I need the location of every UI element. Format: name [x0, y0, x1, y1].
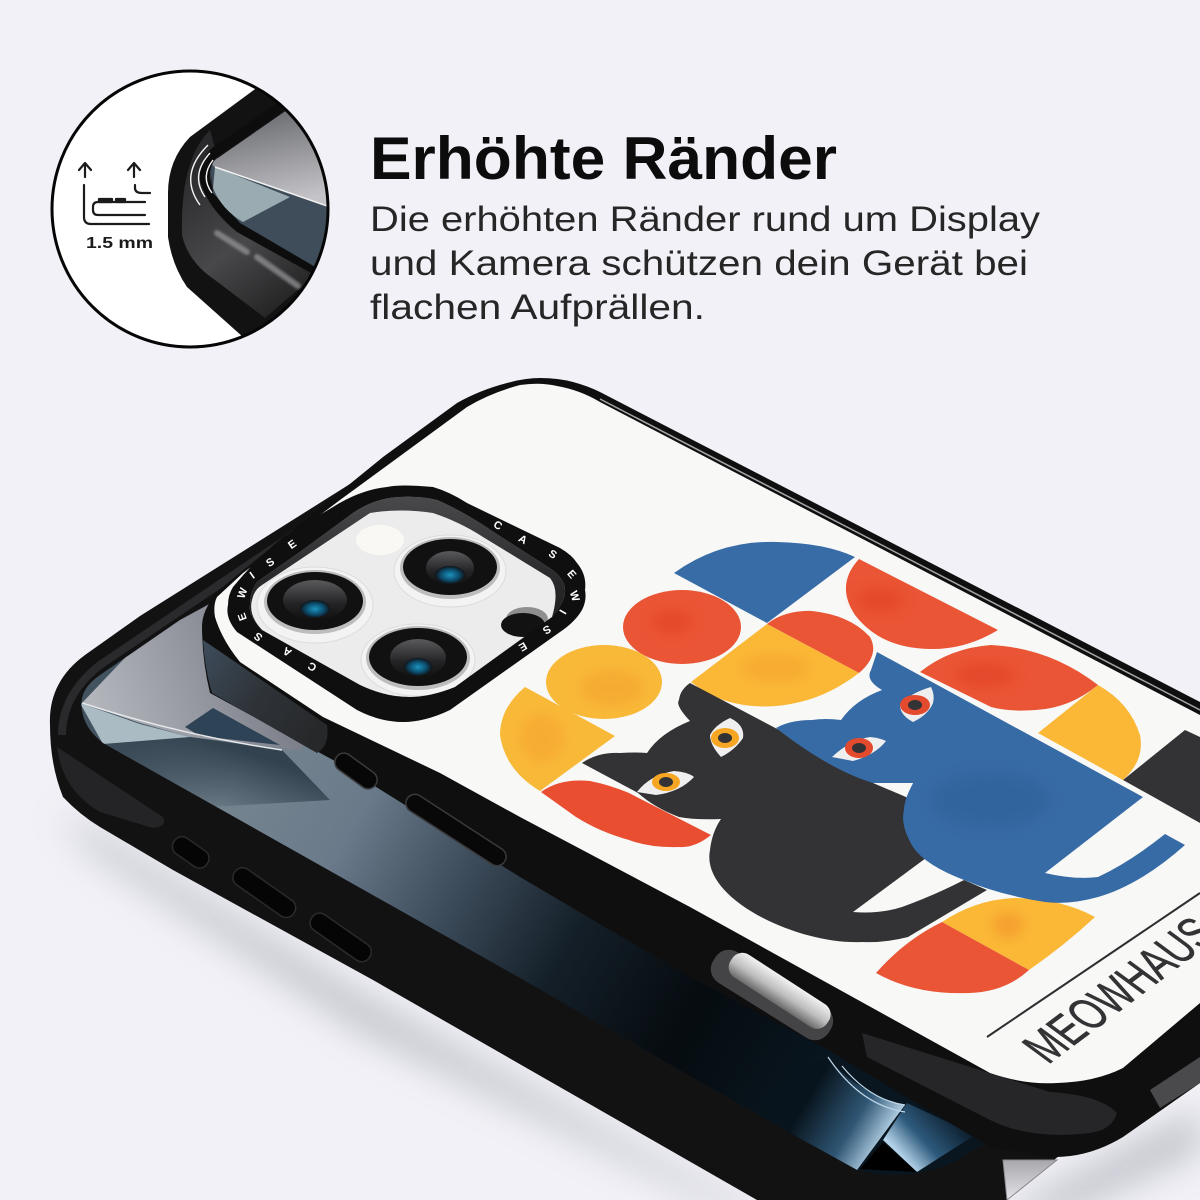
CASEWISE ring text: I [248, 570, 257, 582]
camera module [227, 486, 586, 722]
artwork [500, 542, 1200, 1072]
wallpaper blue wedge right [883, 1103, 975, 1172]
wallpaper navy left shape [116, 734, 330, 806]
lens right [394, 535, 506, 607]
blue quarter shape [674, 542, 855, 623]
description text [370, 200, 1041, 327]
inset raised edge arcs [191, 145, 213, 205]
wallpaper light curves [828, 1057, 905, 1112]
black block right [1123, 730, 1200, 823]
bottom yellow segment [942, 898, 1095, 970]
flash [356, 525, 404, 555]
description text: Die erhöhten Ränder rund um Display [370, 200, 1041, 239]
lower phone silver side edge [1003, 1160, 1057, 1200]
lidar sensor [501, 607, 548, 637]
bottom yellow mottling [992, 912, 1024, 938]
black cat eye lower [637, 771, 694, 795]
icon arrow right [128, 163, 140, 177]
right red leaf [920, 645, 1098, 711]
CASEWISE ring text: C [491, 519, 504, 533]
CASEWISE ring text: S [546, 548, 559, 562]
CASEWISE ring text [235, 519, 582, 673]
lower phone button: volume up [229, 864, 299, 921]
lower phone top highlight [62, 503, 340, 735]
lens left [257, 567, 373, 643]
inset black rim [205, 100, 325, 275]
wallpaper navy shape [185, 708, 280, 745]
upper phone, back facing up [202, 378, 1200, 1157]
camera plate [251, 510, 556, 697]
upper phone bottom bumper patch [862, 1033, 1117, 1135]
icon phone outline [93, 202, 145, 215]
charging port surround [705, 944, 839, 1046]
inset circle border [52, 71, 328, 347]
CASEWISE ring text: E [564, 568, 578, 581]
upper phone case body [202, 378, 1200, 1157]
description text: und Kamera schützen dein Gerät bei [370, 244, 1028, 283]
red quarter mottling [862, 591, 899, 609]
CASEWISE ring text: W [567, 590, 582, 604]
lower phone screen [81, 604, 986, 1175]
title: Erhöhte Ränder [370, 125, 837, 192]
icon camera bump [99, 199, 125, 202]
icon outer bracket [84, 185, 149, 224]
icon hook [135, 185, 150, 193]
inset case highlight [217, 233, 298, 286]
inset screen diagonal line [215, 167, 330, 207]
upper phone speaker grille [1150, 1057, 1200, 1108]
CASEWISE ring text: E [236, 611, 250, 622]
wallpaper light wedge [80, 703, 190, 744]
charging port silver [724, 948, 835, 1033]
icon: raised edge diagram [79, 163, 150, 224]
right yellow segment [1038, 685, 1141, 780]
CASEWISE ring text: I [556, 607, 568, 616]
CASEWISE ring text: A [516, 533, 529, 547]
blue cat [776, 652, 1185, 903]
printed back face [214, 384, 1200, 1083]
icon label: 1.5 mm [86, 235, 153, 252]
inset screen grey gradient [212, 110, 330, 207]
middle yellow mottling [746, 657, 804, 679]
camera recess rim [250, 497, 565, 697]
lower phone button: volume down [307, 910, 375, 965]
left yellow mottling [522, 716, 562, 760]
inset circle base [52, 71, 328, 347]
lower phone bumper frame [50, 462, 1060, 1200]
CASEWISE ring text: E [286, 538, 299, 552]
upper phone button: action [402, 791, 510, 869]
face edge silver line [600, 399, 1200, 710]
wallpaper grey wedge [82, 604, 304, 750]
bottom red segment [876, 922, 1029, 993]
inset screen top region [211, 110, 340, 268]
middle yellow segment [691, 624, 859, 707]
upper phone left bumper patch [203, 640, 328, 753]
CASEWISE ring text: A [281, 644, 294, 658]
wallpaper blue wedge [794, 1068, 905, 1170]
CASEWISE ring text: S [264, 556, 277, 570]
icon arrow left [79, 163, 91, 177]
inset phone corner [168, 84, 350, 350]
CASEWISE ring text: C [306, 659, 319, 673]
red circle [623, 590, 741, 664]
lower phone button: silent [169, 833, 213, 872]
description text: flachen Aufprällen. [370, 288, 705, 327]
inset screen light blue [213, 167, 290, 222]
wallpaper black triangle [860, 1142, 917, 1172]
left red leaf [541, 780, 711, 847]
blue cat mottling [942, 782, 1038, 818]
poster rule line [987, 893, 1200, 1037]
CASEWISE ring text: W [235, 586, 251, 600]
inset circle: raised edge detail [52, 71, 350, 350]
red circle mottling [658, 614, 686, 630]
lower phone, screen facing up [50, 462, 1060, 1200]
CASEWISE ring text: E [516, 639, 529, 653]
camera ring [227, 486, 586, 722]
left yellow segment [500, 687, 615, 791]
white notch between cats [873, 783, 913, 797]
yellow circle mottling [582, 672, 642, 704]
lens bottom [361, 624, 475, 696]
yellow circle [546, 645, 662, 719]
black cat [582, 683, 987, 942]
wallpaper curve highlight [82, 703, 282, 750]
black cat eye upper [710, 718, 743, 757]
red quarter shape [846, 559, 998, 649]
middle red segment [767, 611, 873, 673]
CASEWISE ring text: S [252, 629, 265, 643]
upper phone button: mute [331, 750, 381, 792]
inset case body [168, 84, 350, 350]
CASEWISE ring text: S [540, 622, 553, 636]
blue cat eye upper [900, 687, 934, 722]
lower phone corner bumper patch [57, 747, 164, 828]
inset case side lighter band [182, 130, 330, 318]
right red mottling [962, 666, 1008, 684]
blue cat eye lower [832, 737, 886, 761]
soft shadow under phones [60, 810, 1200, 1200]
